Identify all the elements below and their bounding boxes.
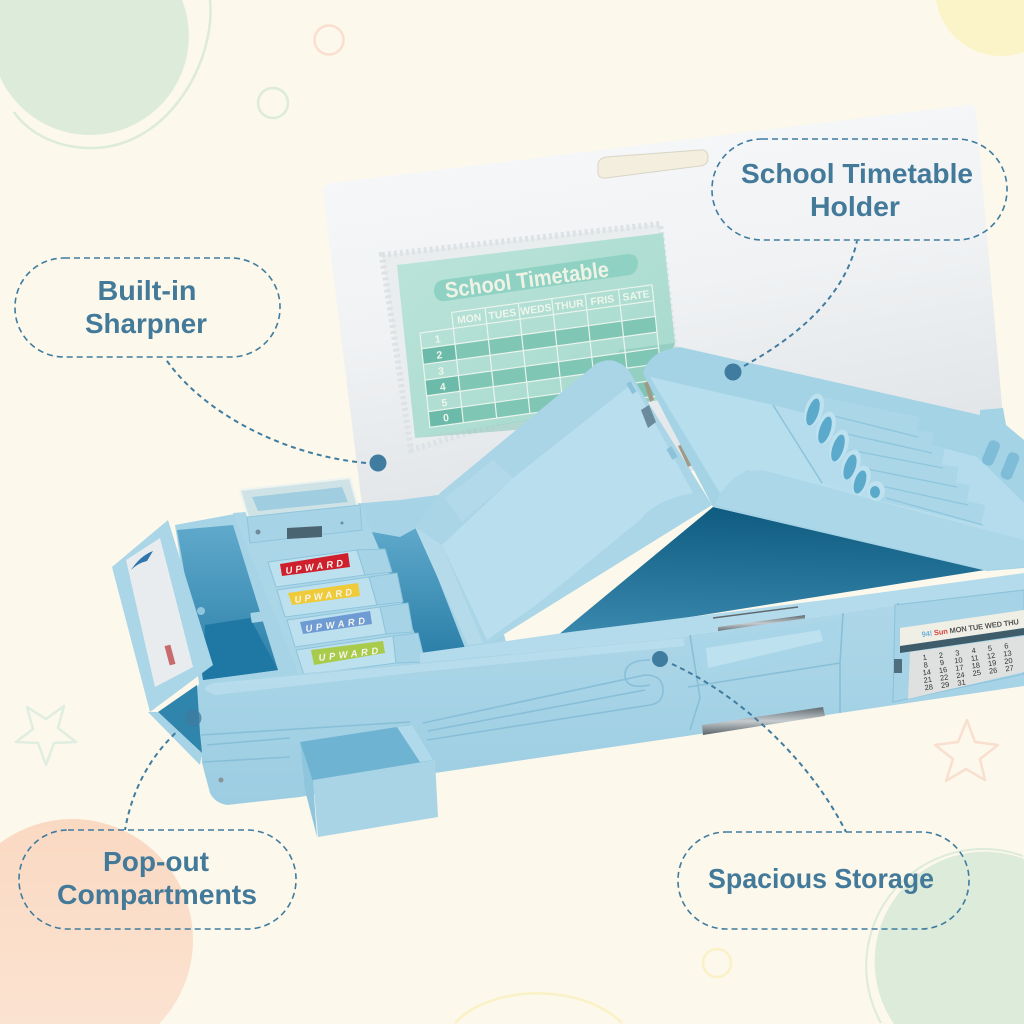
callout: school timetable holder: School Timetable: [741, 158, 973, 189]
callout: school timetable holder: [712, 139, 1007, 240]
calendar dates: 14: [922, 667, 931, 677]
lower lip: [715, 470, 1024, 570]
calendar dates: 10: [954, 655, 963, 665]
door flap: [112, 520, 213, 765]
timetable header and row labels: 4: [439, 382, 446, 394]
callout: spacious storage: Spacious Storage: [708, 863, 934, 894]
calendar dates: 12: [986, 651, 996, 661]
pencil box product: [112, 105, 1024, 837]
calendar dates: 2: [938, 650, 944, 660]
connector: timetable holder: [744, 241, 857, 366]
flap outer rim: [415, 360, 712, 645]
door hinge recess: [158, 685, 202, 753]
decorative ring: yellow bottom: [703, 949, 731, 977]
sharpener panel: [233, 503, 425, 677]
calendar dates: 6: [1004, 641, 1009, 651]
pen tray back panel: [773, 405, 1024, 540]
front rail of box: [195, 590, 1024, 805]
calendar dates: 8: [923, 660, 928, 670]
timetable header and row labels: WEDS: [520, 303, 552, 318]
decorative ring: green bottom right: [866, 849, 1023, 1023]
callout: built-in sharpner: Built-in: [98, 275, 196, 306]
calendar strip: [893, 590, 1024, 702]
calendar dates: 5: [987, 644, 993, 653]
decorative ring: green: [258, 88, 288, 118]
right flap rim: [643, 347, 1024, 571]
callout: school timetable holder: Holder: [810, 191, 900, 222]
eraser buttons: [268, 549, 425, 675]
timetable header and row labels: 5: [441, 398, 448, 410]
decorative arc: yellow bottom: [455, 993, 622, 1023]
timetable header and row labels: 2: [436, 350, 443, 362]
calendar dates: 31: [957, 678, 966, 688]
flap tab: [445, 460, 513, 522]
connector: storage: [672, 664, 846, 832]
icon: peach star: [935, 720, 998, 781]
timetable card shading: [415, 343, 675, 438]
decorative circle: green bottom right: [875, 852, 1024, 1024]
calendar weekday header: 94! Sun MON TUE WED THU: [921, 617, 1019, 639]
left compartment: [177, 525, 278, 680]
calendar sheet: [908, 636, 1024, 699]
rail recess: [692, 620, 840, 675]
dot: sharpener: [370, 454, 386, 472]
tag text: UPWARD: [305, 616, 366, 635]
door face: [112, 520, 213, 712]
calendar dates: 20: [1004, 656, 1013, 666]
timetable header and row labels: SATE: [622, 289, 650, 304]
rivet: [218, 778, 224, 782]
right end tube slots: [981, 439, 1021, 481]
lid clip: [598, 150, 708, 178]
groove openings: [800, 391, 885, 501]
sharpener slot: [287, 526, 322, 539]
timetable header and row labels: 1: [434, 334, 441, 346]
rail back strip: [420, 573, 1024, 663]
connector: sharpener: [165, 358, 366, 463]
flap lower lip: [490, 493, 712, 643]
timetable header and row labels: 3: [438, 366, 445, 378]
calendar dates: 22: [939, 672, 949, 683]
pen tray edge: [773, 405, 822, 483]
door label logo: [131, 551, 153, 570]
calendar dates: [920, 641, 1015, 692]
green tag: [311, 641, 385, 665]
drawer front: [313, 760, 438, 837]
timetable title: School Timetable: [443, 257, 610, 303]
tag text: UPWARD: [285, 558, 344, 577]
rail top highlight: [205, 638, 685, 695]
dot: timetable holder: [724, 364, 742, 380]
calendar dates: 25: [972, 668, 982, 678]
calendar dates: 3: [955, 648, 960, 658]
main storage interior: [540, 507, 985, 650]
timetable header and row labels: 0: [443, 413, 450, 425]
door label mark: [165, 645, 175, 665]
calendar dates: 27: [1005, 663, 1014, 673]
drawer interior: [300, 725, 433, 782]
callout: pop-out compartments: [19, 830, 296, 929]
folding right flap with pen tray: [643, 347, 1024, 571]
calendar dates: 17: [955, 663, 964, 673]
callout: built-in sharpner: [15, 258, 280, 357]
callout: pop-out compartments: Compartments: [57, 879, 257, 910]
timetable card: [397, 233, 675, 438]
door label: [126, 538, 193, 687]
dot: storage: [652, 651, 668, 667]
side tabs: [357, 549, 392, 575]
flap inner face: [442, 383, 693, 640]
blue tag: [300, 611, 372, 634]
red tag: [280, 553, 350, 576]
calendar dates: 26: [988, 666, 998, 676]
calendar dates: 18: [971, 660, 981, 671]
calendar dates: 9: [939, 658, 945, 667]
bottom hinge: [702, 707, 825, 735]
decorative ring: green top left: [14, 0, 211, 148]
right flap inner face: [650, 377, 1024, 540]
timetable title banner: [434, 254, 638, 301]
open lid: [323, 105, 1003, 505]
pen grooves: [800, 391, 983, 525]
decorative circle: green top left: [0, 0, 189, 135]
callout: pop-out compartments: Pop-out: [103, 846, 209, 877]
groove shadow lines: [826, 414, 983, 525]
callout: spacious storage: [678, 832, 969, 929]
timetable sleeve: [382, 224, 677, 450]
button plates: [268, 550, 365, 587]
rail recess highlight: [706, 630, 823, 668]
callout: built-in sharpner: Sharpner: [85, 308, 207, 339]
timetable header and row labels: TUES: [488, 308, 517, 322]
rail groove lines: [201, 603, 898, 762]
calendar dates: 11: [970, 653, 979, 663]
icon: green star: [16, 706, 76, 765]
timetable header and row labels: THUR: [554, 298, 585, 313]
yellow tag: [288, 583, 360, 605]
timetable header and row labels: FRIS: [590, 294, 615, 308]
top hinge: [713, 607, 805, 632]
flap side strip: [415, 527, 483, 645]
calendar dates: 21: [923, 675, 933, 685]
connector: pop-out: [125, 727, 182, 830]
built-in sharpener: [240, 478, 362, 543]
calendar dates: 16: [938, 665, 948, 675]
base tray back: [175, 495, 510, 690]
timetable header and row labels: [433, 289, 660, 425]
calendar dates: 19: [987, 658, 997, 668]
calendar dates: 1: [922, 653, 927, 662]
sharpener base: [247, 505, 362, 543]
tag text: UPWARD: [318, 646, 379, 664]
calendar dates: 4: [971, 646, 976, 655]
dot: pop-out: [184, 710, 202, 726]
pop-out drawer: [300, 725, 438, 837]
calendar window: [900, 610, 1024, 648]
timetable header and row labels: MON: [457, 312, 482, 327]
tag text: UPWARD: [294, 587, 353, 606]
folding left flap: [415, 360, 712, 645]
clear sharpener cover: [240, 478, 358, 517]
calendar slider: [894, 659, 902, 673]
flap hinges: [626, 381, 692, 467]
calendar dates: 28: [924, 682, 934, 692]
door lower side: [148, 712, 202, 765]
decorative ring: peach: [314, 26, 344, 54]
tag text: [285, 558, 379, 664]
decorative circle: yellow top right: [936, 0, 1024, 56]
calendar dates: 13: [1003, 648, 1012, 659]
second compartment: [372, 527, 465, 655]
calendar dates: 24: [956, 670, 965, 680]
timetable grid: [418, 285, 664, 427]
calendar dates: 29: [940, 680, 950, 690]
decorative circle: peach bottom left: [0, 819, 193, 1024]
